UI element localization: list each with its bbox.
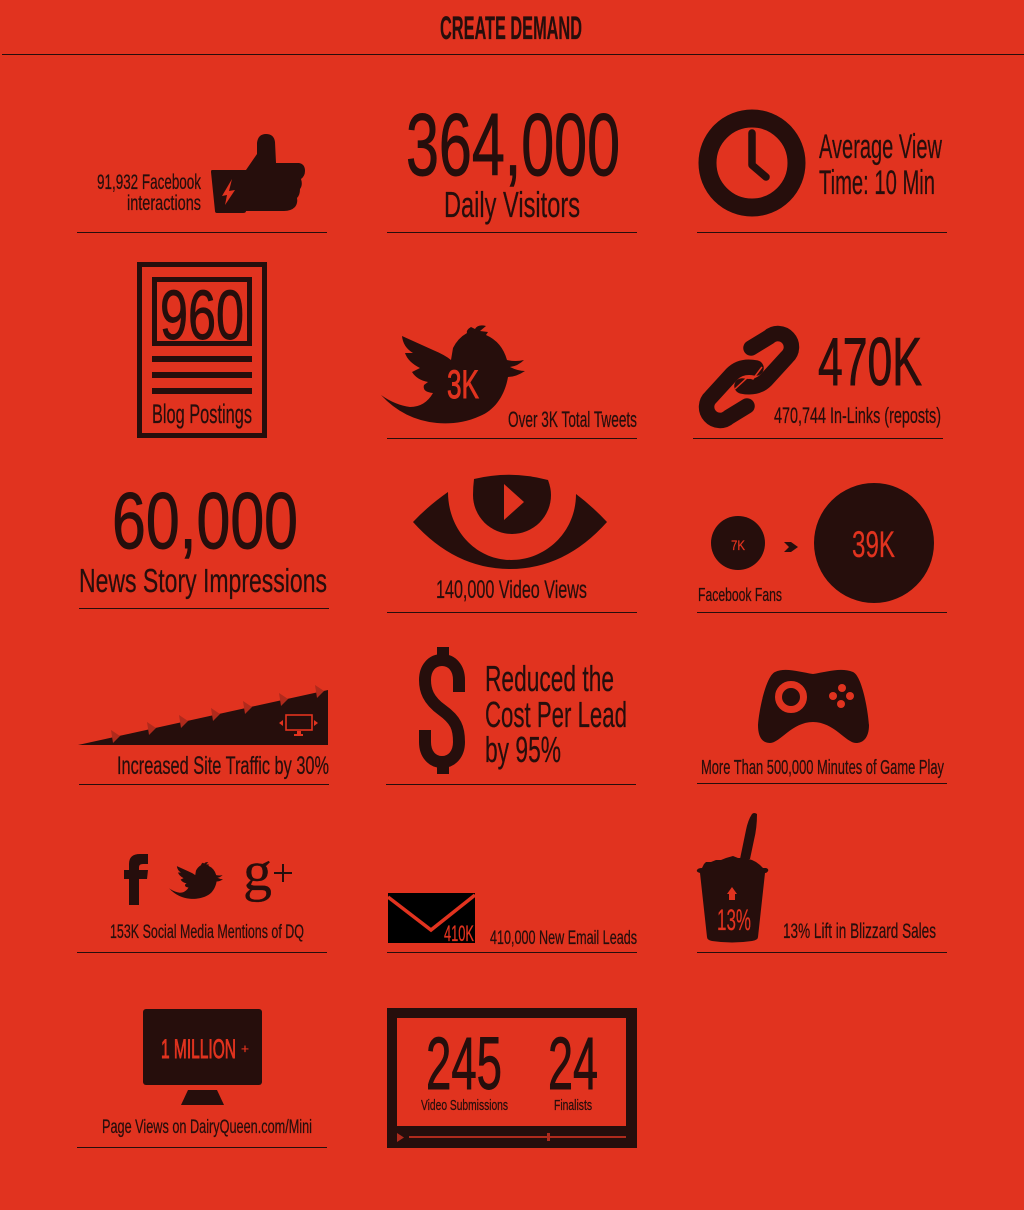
text: 91,932 Facebook interactions (97, 171, 201, 215)
icon: desktop monitor (143, 1009, 262, 1105)
icon: facebook f (124, 854, 148, 905)
panel: facebook interactions (97, 134, 305, 215)
label: 13% Lift in Blizzard Sales: 13% Lift in Blizzard Sales (783, 920, 936, 943)
icon: blizzard cup with spoon (697, 813, 768, 942)
text: Average View Time: 10 Min: Time: 10 Min (819, 164, 935, 202)
panel: video submissions player (387, 1008, 637, 1148)
label: Page Views on DairyQueen.com/Mini: Page Views on DairyQueen.com/Mini (102, 1117, 312, 1138)
text: 91,932 Facebook interactions: interactions (127, 192, 201, 215)
icon: small twitter bird (169, 862, 223, 899)
label: News Story Impressions: News Story Impressions (79, 562, 327, 599)
panel: blizzard sales (697, 813, 936, 943)
icon: desktop monitor: 1 MILLION (161, 1034, 236, 1064)
stat: 24: 24 (548, 1022, 598, 1105)
chart: rising wedge (78, 690, 328, 745)
label: 470,744 In-Links (reposts): 470,744 In-Links (reposts) (774, 403, 941, 428)
panel: video views (413, 475, 607, 604)
label: Daily Visitors: Daily Visitors (444, 184, 580, 225)
icon: eye with play button (413, 475, 607, 569)
icon: chain link (707, 334, 791, 420)
stat: 470K: 470K (818, 324, 922, 400)
panel: site traffic (78, 685, 329, 780)
label: Finalists: Finalists (554, 1097, 592, 1114)
icon: large circle 39K: 39K (852, 524, 895, 565)
panel: total tweets (381, 325, 637, 432)
player controls (397, 1133, 626, 1142)
label: Video Submissions: Video Submissions (421, 1097, 508, 1114)
icon: game controller (758, 670, 869, 743)
panel: daily visitors (406, 95, 620, 225)
text: Average View Time: 10 Min (819, 128, 942, 202)
stat: 245: 245 (426, 1022, 502, 1105)
text: Average View Time: 10 Min: Average View (819, 128, 942, 166)
stat: 60,000: 60,000 (112, 476, 298, 565)
icon: twitter bird (381, 325, 525, 423)
panel: average view time (708, 118, 942, 208)
icon: clock (708, 118, 796, 208)
panel: cost per lead (425, 647, 627, 774)
icon: dollar sign (425, 647, 459, 774)
panel: page views (102, 1009, 312, 1138)
icon: monitor with arrows (279, 715, 318, 736)
label: 140,000 Video Views: 140,000 Video Views (436, 576, 587, 604)
panel: social media mentions (110, 841, 304, 943)
stat: 3K: 3K (447, 363, 479, 407)
icon: google plus (243, 841, 292, 903)
video player frame (387, 1008, 637, 1148)
icon: google plus: g (243, 841, 272, 903)
icon: desktop monitor: + (241, 1041, 249, 1056)
icon: envelope (388, 893, 475, 946)
label: Over 3K Total Tweets: Over 3K Total Tweets (508, 407, 637, 432)
title: CREATE DEMAND (440, 10, 582, 46)
panel: email leads (388, 893, 637, 949)
icon: document frame (140, 264, 264, 436)
text: Reduced the Cost Per Lead by 95%: Reduced the (485, 658, 614, 699)
label: 410,000 New Email Leads: 410,000 New Email Leads (490, 928, 637, 949)
text: Reduced the Cost Per Lead by 95% (485, 658, 627, 770)
label: Increased Site Traffic by 30%: Increased Site Traffic by 30% (117, 752, 329, 780)
icon: envelope: 410K (444, 921, 474, 946)
icon: blizzard cup with spoon: 13% (717, 904, 751, 937)
panel: blog postings (140, 264, 264, 436)
arrow (784, 542, 798, 552)
icon: large circle 39K (814, 483, 934, 603)
panel: facebook fans (698, 483, 934, 605)
label: Blog Postings: Blog Postings (152, 399, 252, 429)
panel: news story impressions (79, 476, 327, 599)
label: Facebook Fans: Facebook Fans (698, 585, 782, 605)
icon: small circle 7K: 7K (731, 537, 746, 553)
stat: 960: 960 (160, 276, 244, 354)
panel: in-links (707, 324, 941, 428)
text: Reduced the Cost Per Lead by 95%: by 95% (485, 729, 561, 770)
panel: game play (701, 670, 944, 779)
text: Reduced the Cost Per Lead by 95%: Cost Per Lead (485, 694, 627, 735)
stat: 364,000: 364,000 (406, 95, 620, 194)
label: 153K Social Media Mentions of DQ: 153K Social Media Mentions of DQ (110, 922, 304, 943)
icon: thumbs up with lightning (211, 134, 305, 213)
chart markers (111, 685, 324, 743)
icon: small circle 7K (711, 516, 765, 570)
text: 91,932 Facebook interactions: 91,932 Facebook (97, 171, 201, 194)
